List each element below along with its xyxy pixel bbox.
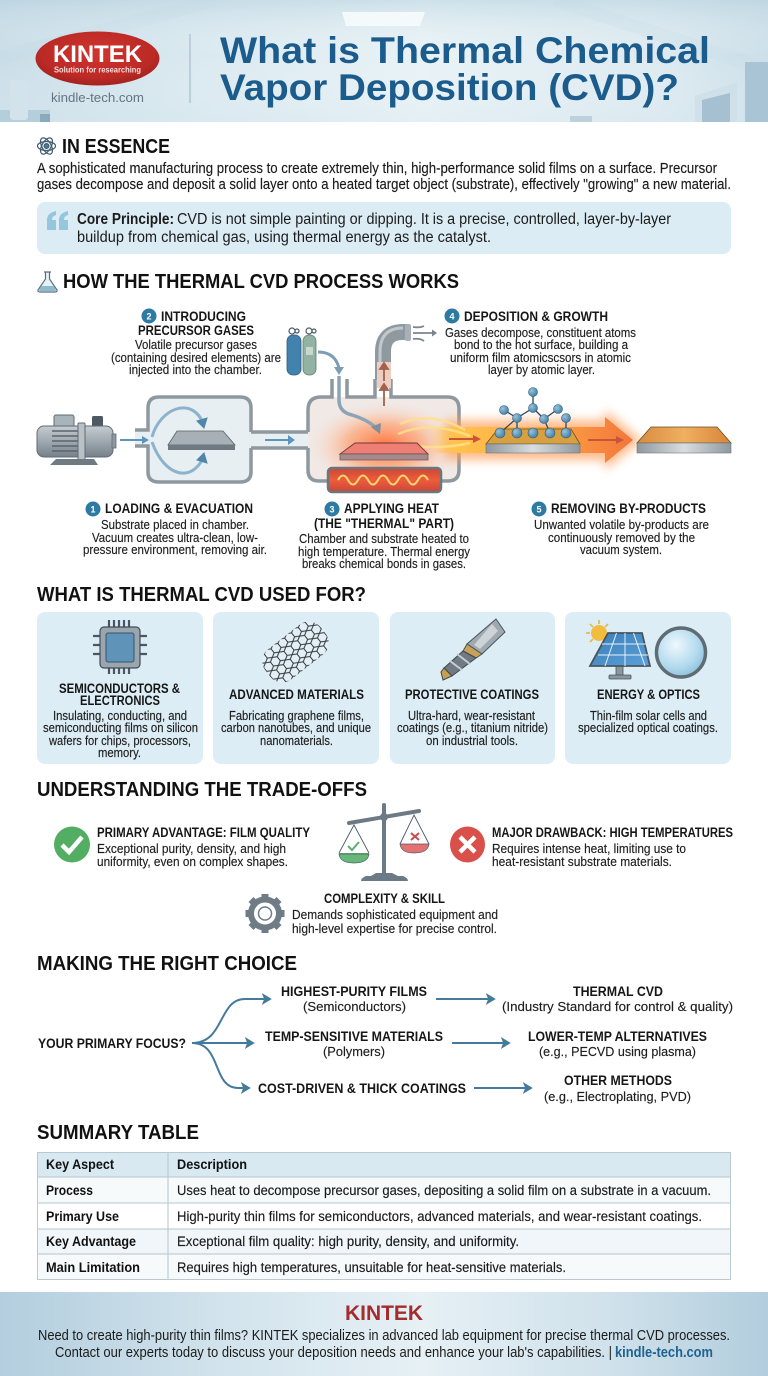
step 2 title: INTRODUCING [161,309,246,324]
card 2 description [221,708,371,748]
heading: in essence: IN ESSENCE [62,136,170,158]
icon: sun [586,620,608,642]
step 5 description [534,517,709,557]
step 1: loading and evacuation [83,501,267,557]
step 3 description [298,531,471,571]
card 2 title: ADVANCED MATERIALS [229,687,364,702]
step number 5: 5 [536,504,542,514]
step 5 description: Unwanted volatile by-products are [534,517,709,532]
card 3 description [397,708,548,748]
arrow: gas to inlet [318,352,344,375]
step number 5 [532,502,546,516]
option: temp sensitive [265,1029,443,1059]
step 2 description [111,337,281,377]
card 3 description: on industrial tools. [426,733,518,748]
card 1 title: SEMICONDUCTORS & [59,681,180,696]
logo url: kindle-tech.com [51,91,144,105]
footer text: Contact our experts today to discuss your deposition needs and enhance your lab's capabilities. | [55,1344,612,1361]
drawback text: Requires intense heat, limiting use to [492,841,686,856]
step 3 description: high temperature. Thermal energy [298,544,471,559]
icon: vacuum pump [37,415,116,465]
footer text: kindle-tech.com [615,1344,713,1361]
step 5 description: continuously removed by the [548,530,695,545]
row: main limitation: Main Limitation [46,1260,140,1275]
finished coated substrate [637,427,731,453]
result: lower temp [528,1029,707,1059]
result: thermal cvd: THERMAL CVD [573,984,663,999]
swirl arrows [152,408,207,473]
heater [328,468,441,492]
step 4 title: DEPOSITION & GROWTH [464,309,608,324]
step number 3 [324,502,340,516]
table header row [46,1157,247,1172]
heading: summary table: SUMMARY TABLE [37,1122,199,1144]
chamber 1 with substrate [135,397,308,482]
step 5 description: vacuum system. [580,542,662,557]
step 3 title: APPLYING HEAT [344,501,440,516]
step 3 title: (THE "THERMAL" PART) [314,516,454,531]
step 1 description: Substrate placed in chamber. [101,517,249,532]
icon: check [54,826,90,862]
result: other methods: (e.g., Electroplating, PVD) [544,1089,691,1104]
card 2 description: carbon nanotubes, and unique [221,720,371,735]
row: key advantage: Key Advantage [46,1234,136,1249]
step 3 title [314,501,454,531]
heading: trade-offs: UNDERSTANDING THE TRADE-OFFS [37,779,367,801]
advantage text: PRIMARY ADVANTAGE: FILM QUALITY [97,825,310,840]
core principle text: CVD is not simple painting or dipping. It is a precise, controlled, layer-by-layer [177,211,671,228]
card 1 description [43,708,198,760]
root question: YOUR PRIMARY FOCUS? [38,1036,186,1051]
card: protective coatings [390,612,555,764]
icon: drill bit [441,619,505,680]
atoms [495,388,571,438]
step 1 description: pressure environment, removing air. [83,542,267,557]
icon: exhaust elbow [377,324,437,388]
step 5: removing by-products [532,501,709,557]
logo: KINTEK badge: KINTEK [53,41,143,68]
table header row: Key Aspect [46,1157,114,1172]
result: other methods: OTHER METHODS [564,1073,672,1088]
step 2 title: PRECURSOR GASES [138,323,254,338]
step 2: introducing precursor gases [111,308,281,377]
icon: gear [246,894,284,933]
deposition substrate with atoms [486,388,580,453]
icon: chip [93,620,147,674]
step 4: deposition and growth [444,308,636,377]
result: lower temp: (e.g., PECVD using plasma) [539,1044,696,1059]
card 1 description: wafers for chips, processors, [48,733,191,748]
option: cost driven: COST-DRIVEN & THICK COATINGS [258,1081,466,1096]
step 3 description: breaks chemical bonds in gases. [302,556,466,571]
card 4 description: Thin-film solar cells and [590,708,707,723]
icon: atom [38,136,56,156]
option: highest purity: (Semiconductors) [303,999,406,1014]
complexity text: Demands sophisticated equipment and [292,907,498,922]
decision tree [38,984,733,1104]
row: main limitation: Requires high temperatures, unsuitable for heat-sensitive materials. [177,1260,566,1275]
heading: right choice: MAKING THE RIGHT CHOICE [37,953,297,975]
card 1 description: Insulating, conducting, and [53,708,187,723]
step 2 title [138,309,254,338]
step 4 description [445,325,636,377]
footer [0,1292,768,1376]
icon: optical lens [656,628,706,677]
card 1 title [59,681,180,708]
gas inlet arrow [339,376,381,434]
core principle text: buildup from chemical gas, using thermal energy as the catalyst. [77,229,491,246]
result arrows [436,999,530,1088]
gas cylinders [287,328,316,375]
card 4 description: specialized optical coatings. [578,720,718,735]
card 2 description: Fabricating graphene films, [229,708,364,723]
chamber 2 shell [308,379,459,481]
callout: core principle [37,202,731,254]
logo: KINTEK badge [36,32,160,86]
footer text [38,1327,730,1361]
card: advanced materials [213,611,379,764]
option: temp sensitive: (Polymers) [323,1044,385,1059]
drawback text: heat-resistant substrate materials. [492,854,672,869]
card 1 title: ELECTRONICS [80,693,160,708]
card 3 title: PROTECTIVE COATINGS [405,687,539,702]
step 4 description: bond to the hot surface, building a [454,337,629,352]
card 1 description: memory. [98,745,141,760]
step 2 description: (containing desired elements) are [111,350,281,365]
card 3 description: Ultra-hard, wear-resistant [408,708,535,723]
icon: solar panel [590,633,650,679]
complexity text: high-level expertise for precise control. [292,921,497,936]
icon: carbon nanotube [262,622,329,682]
result: lower temp: LOWER-TEMP ALTERNATIVES [528,1029,707,1044]
step 3 description: Chamber and substrate heated to [299,531,469,546]
option: highest purity: HIGHEST-PURITY FILMS [281,984,427,999]
header banner [0,0,768,122]
process diagram [37,324,731,492]
arrow: big orange flow [398,410,642,470]
row: primary use: High-purity thin films for semiconductors, advanced materials, and wear-resistant coatings. [177,1209,702,1224]
heated substrate [340,443,428,460]
step 4 description: Gases decompose, constituent atoms [445,325,636,340]
core principle text [77,211,671,246]
card 3 description: coatings (e.g., titanium nitride) [397,720,548,735]
step number 4 [444,308,460,324]
step 5 title: REMOVING BY-PRODUCTS [551,501,706,516]
card: semiconductors and electronics [37,612,203,764]
complexity text [292,891,498,936]
core principle text: Core Principle: [77,211,174,228]
heading: uses: WHAT IS THERMAL CVD USED FOR? [37,584,366,606]
icon: cross [450,826,485,862]
step number 2 [142,308,156,324]
branch arrows [192,999,269,1088]
row: primary use: Primary Use [46,1209,119,1224]
icon: flask [38,272,57,292]
advantage text: Exceptional purity, density, and high [97,841,286,856]
row: process: Uses heat to decompose precursor gases, depositing a solid film on a substrate in a vacuum. [177,1183,711,1198]
arrows: flow to chambers [120,435,295,445]
header divider [190,34,191,103]
card 4 description [578,708,718,735]
footer brand: KINTEK [345,1302,423,1325]
step 4 description: layer by atomic layer. [488,362,595,377]
row: process: Process [46,1183,93,1198]
step number 1: 1 [90,504,96,514]
step number 2: 2 [146,312,152,322]
step 3: applying heat [298,501,471,571]
heading: process: HOW THE THERMAL CVD PROCESS WORKS [63,271,459,293]
row: key advantage: Exceptional film quality: high purity, density, and uniformity. [177,1234,519,1249]
card 1 description: semiconducting films on silicon [43,720,198,735]
card 4 title: ENERGY & OPTICS [597,687,700,702]
card: energy and optics [565,612,731,764]
step 1 description: Vacuum creates ultra-clean, low- [92,530,258,545]
table header row: Description [177,1157,247,1172]
title [220,30,710,108]
title: Vapor Deposition (CVD)? [220,67,679,108]
step number 4: 4 [450,312,455,322]
result: thermal cvd [502,984,733,1014]
card 2 description: nanomaterials. [260,733,333,748]
advantage text: uniformity, even on complex shapes. [97,854,288,869]
icon: quote mark [47,211,68,230]
arrows: gases rising [380,363,388,406]
complexity text: COMPLEXITY & SKILL [324,891,445,906]
drawback text [492,825,733,869]
heat glow [309,402,461,490]
title: What is Thermal Chemical [220,30,710,71]
summary table [37,1152,731,1280]
step 1 title: LOADING & EVACUATION [105,501,253,516]
option: highest purity [281,984,427,1014]
step 2 description: Volatile precursor gases [135,337,257,352]
result: other methods [544,1073,691,1104]
logo: KINTEK badge: Solution for researching [54,64,141,74]
step number 3: 3 [330,504,335,514]
option: temp sensitive: TEMP-SENSITIVE MATERIALS [265,1029,443,1044]
intro paragraph [37,160,731,193]
chamber 2 interior [308,397,459,481]
step 2 description: injected into the chamber. [129,362,262,377]
step 1 description [83,517,267,557]
result: thermal cvd: (Industry Standard for control & quality) [502,999,733,1014]
step 4 description: uniform film atomicscsors in atomic [450,350,632,365]
icon: balance scale [339,803,429,881]
substrate [168,431,235,450]
step number 1 [86,502,100,516]
advantage text [97,825,310,869]
